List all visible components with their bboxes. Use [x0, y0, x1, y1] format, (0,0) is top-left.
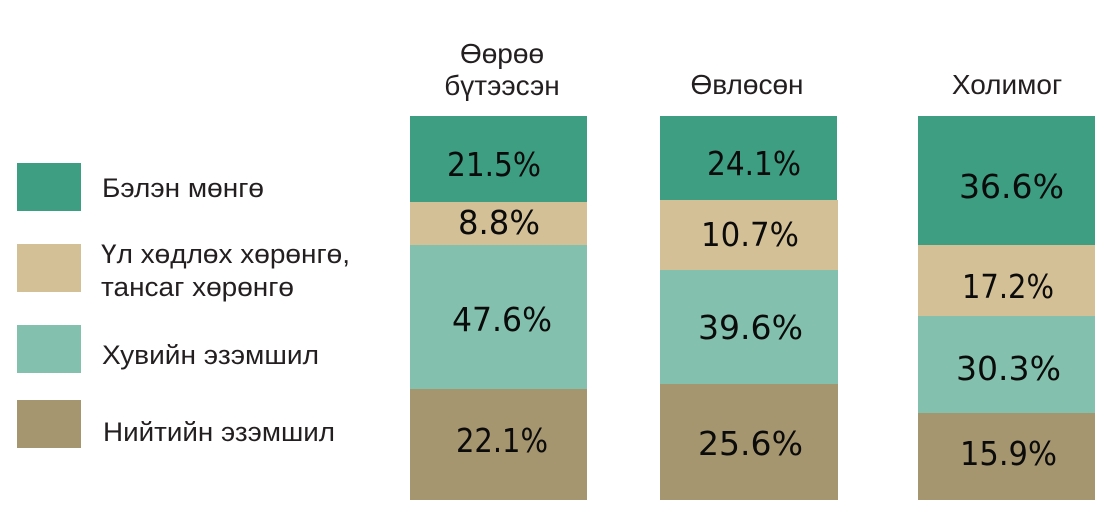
segment: cash 24.1%	[660, 116, 837, 200]
segment: real estate 8.8%: 8.8%	[458, 203, 540, 242]
legend label: private ownership: Хувийн эзэмшил	[102, 340, 319, 370]
segment: public 22.1%	[410, 389, 587, 500]
segment: public 22.1%: 22.1%	[456, 421, 548, 460]
segment: public 25.6%: 25.6%	[698, 424, 803, 463]
segment: cash 21.5%: 21.5%	[447, 145, 541, 184]
segment: real estate 8.8%	[410, 202, 587, 245]
segment: private 39.6%: 39.6%	[698, 308, 803, 347]
legend swatch: real estate	[17, 244, 81, 292]
segment: cash 24.1%: 24.1%	[707, 144, 801, 183]
segment: private 30.3%	[918, 316, 1095, 413]
column heading: бүтээсэн	[444, 70, 560, 101]
legend label: real estate	[101, 239, 350, 302]
legend swatch: cash	[17, 163, 81, 211]
segment: private 47.6%: 47.6%	[452, 300, 552, 339]
column 3: mixed	[918, 69, 1095, 500]
column heading	[444, 38, 560, 101]
segment: public 15.9%: 15.9%	[960, 434, 1057, 473]
segment: real estate 10.7%: 10.7%	[701, 215, 799, 254]
legend swatch: private ownership	[17, 325, 81, 373]
segment: public 25.6%	[660, 384, 838, 500]
segment: private 47.6%	[410, 245, 587, 389]
column 2: inherited	[660, 69, 838, 500]
column heading: Холимог	[952, 69, 1062, 100]
segment: cash 21.5%	[410, 116, 587, 202]
segment: private 30.3%: 30.3%	[956, 349, 1061, 388]
column heading: Өвлөсөн	[691, 69, 803, 100]
column 1: self-made	[410, 38, 587, 500]
segment: private 39.6%	[660, 270, 838, 384]
legend label: real estate: тансаг хөрөнгө	[101, 272, 294, 302]
column heading: Өөрөө	[460, 38, 544, 69]
legend swatch: public ownership	[17, 400, 81, 448]
segment: cash 36.6%	[918, 116, 1095, 245]
segment: cash 36.6%: 36.6%	[959, 167, 1064, 206]
segment: real estate 17.2%: 17.2%	[962, 267, 1054, 306]
legend label: public ownership: Нийтийн эзэмшил	[103, 417, 335, 447]
legend label: cash: Бэлэн мөнгө	[102, 173, 264, 203]
legend label: real estate: Үл хөдлөх хөрөнгө,	[101, 239, 350, 269]
segment: public 15.9%	[918, 413, 1095, 500]
segment: real estate 17.2%	[918, 245, 1095, 316]
legend	[17, 163, 350, 448]
segment: real estate 10.7%	[660, 200, 838, 270]
